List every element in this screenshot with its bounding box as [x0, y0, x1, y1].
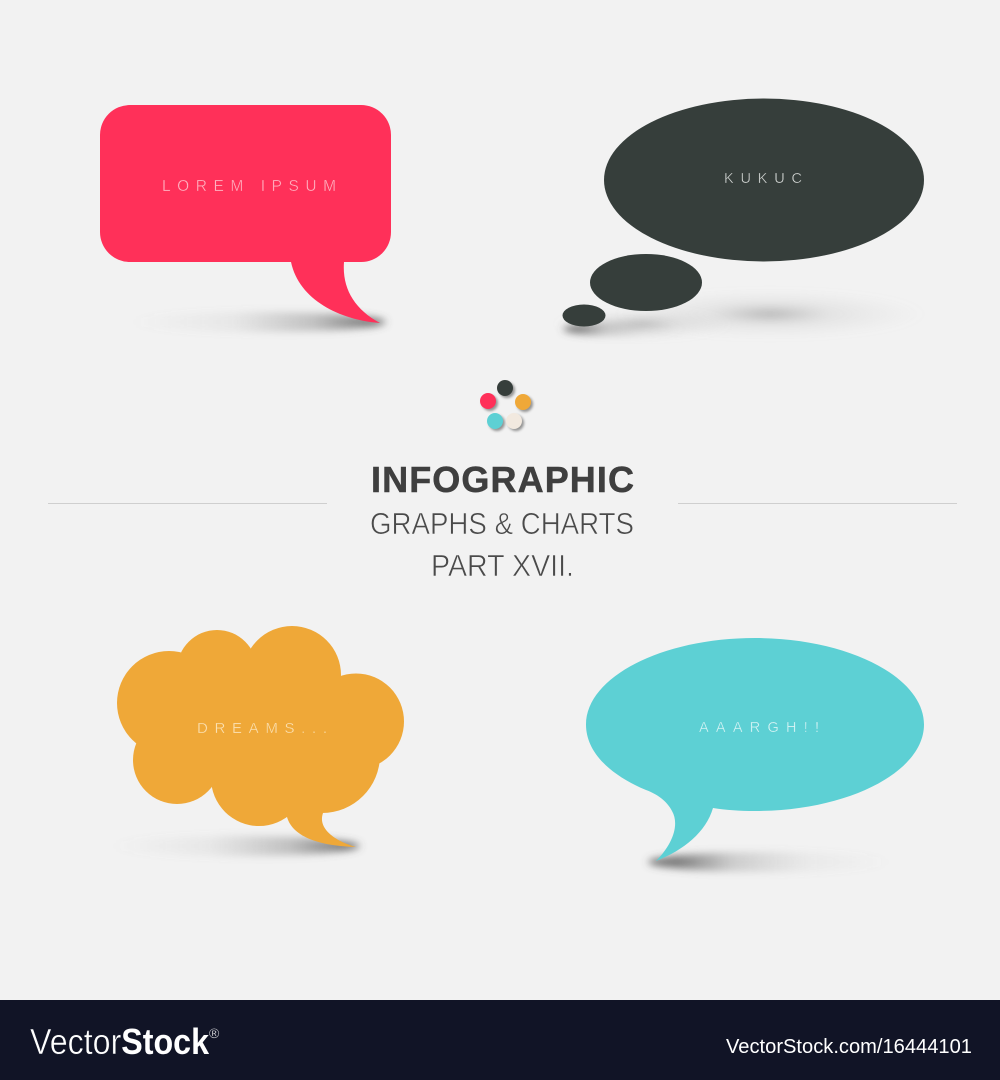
panel: teal speech bubble [586, 638, 924, 872]
panel: orange cloud bubble [110, 626, 404, 856]
shadow: pink bubble [130, 312, 386, 332]
footer id text: VectorStock.com/16444101 [726, 1036, 972, 1058]
label: lorem ipsum: LOREM IPSUM [162, 178, 336, 195]
shape: pink rounded bubble with tail [100, 105, 391, 323]
label: aaargh: AAARGH!! [699, 720, 819, 736]
panel: centre title block [370, 380, 634, 583]
subheading: part xvii: PART XVII. [431, 548, 574, 583]
subheading: graphs and charts: GRAPHS & CHARTS [370, 506, 634, 541]
label: kukuc: KUKUC [724, 171, 802, 187]
shadow: small bubble [563, 322, 687, 336]
icon: five coloured dots [480, 380, 533, 431]
shape: large oval [604, 98, 924, 262]
shape: small oval [562, 304, 606, 326]
heading: infographic: INFOGRAPHIC [371, 459, 634, 500]
shadow: teal bubble [648, 852, 892, 872]
shadow: large bubble [615, 290, 925, 338]
shape: teal oval bubble with tail [586, 638, 924, 861]
panel: pink speech bubble [100, 105, 391, 332]
footer bar [0, 1000, 1000, 1080]
logo: registered mark: ® [209, 1025, 220, 1041]
shadow: cloud bubble [110, 836, 360, 856]
shape: cloud with tail [117, 626, 404, 847]
shadow: middle bubble [553, 309, 733, 339]
panel: dark thought bubble [553, 98, 925, 339]
label: dreams: DREAMS... [197, 720, 327, 737]
logo: vectorstock: VectorStock [30, 1021, 210, 1062]
shape: middle oval [590, 254, 702, 311]
